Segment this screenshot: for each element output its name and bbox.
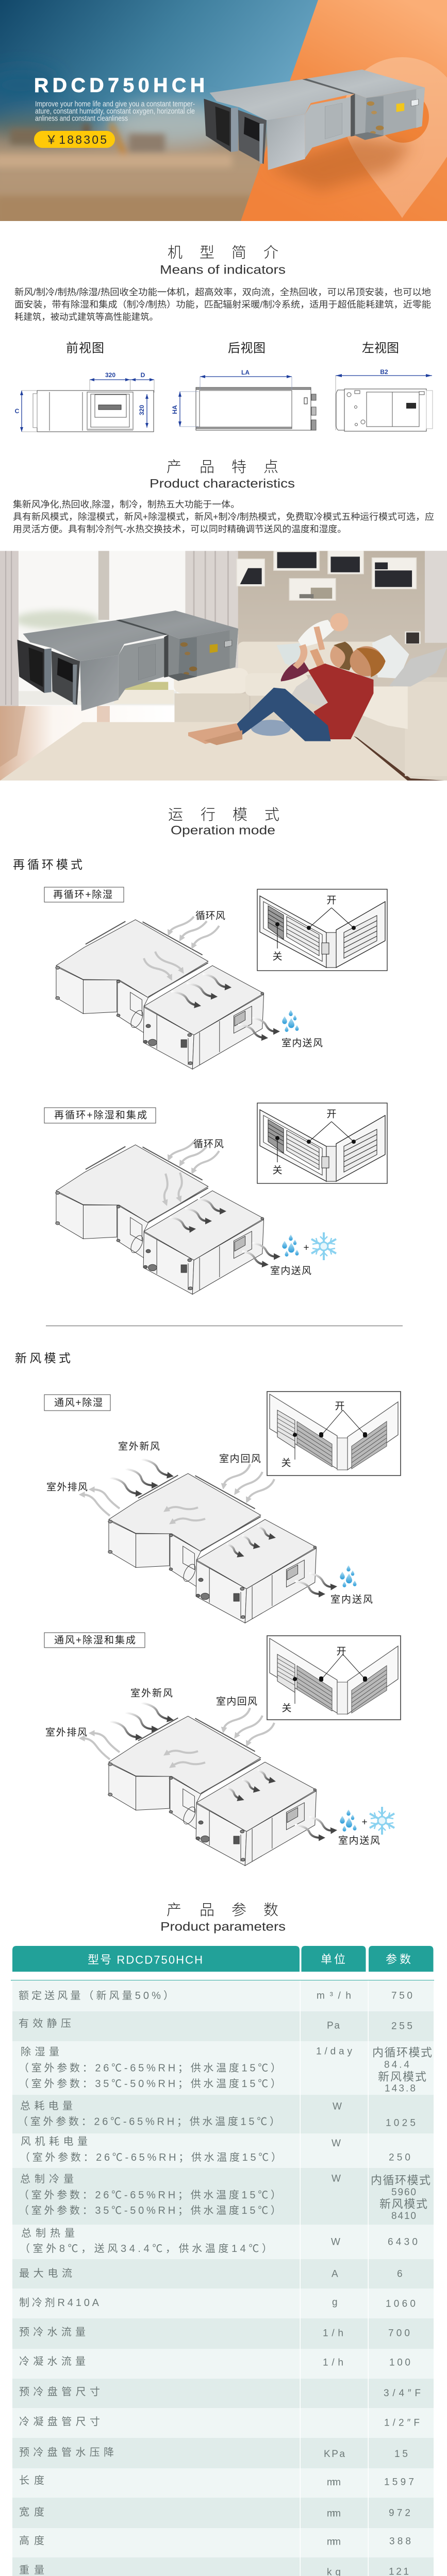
price pill: ￥188305	[45, 133, 107, 146]
icon: water drops	[340, 1809, 357, 1832]
label: outdoor exhaust air: 室外排风	[46, 1482, 88, 1493]
row: fan power	[20, 2136, 410, 2163]
heading: means of indicators	[160, 244, 286, 277]
label: indoor supply air: 室内送风	[282, 1038, 323, 1049]
damper inset	[267, 1392, 401, 1476]
row: dehumidification: 143.8	[385, 2083, 416, 2094]
row: total heating: （室外8℃，送风34.4℃，供水温度14℃）	[20, 2243, 272, 2255]
row: total cooling: （室外参数：35℃-50%RH；供水温度15℃）	[19, 2205, 281, 2216]
row: total heating: W	[331, 2237, 340, 2247]
unit line drawing	[108, 1473, 317, 1623]
row: weight	[19, 2564, 409, 2576]
mode label box: 通风+除湿	[54, 1397, 103, 1409]
row: precooling coil size: 3/4″F	[384, 2388, 421, 2399]
row: total cooling: 8410	[391, 2211, 416, 2222]
location pin shape	[343, 57, 447, 218]
label: indoor supply air: 室内送风	[338, 1835, 380, 1846]
row: total power: 1025	[386, 2117, 416, 2129]
panel: front view drawing: D	[141, 371, 145, 379]
row: total heating: 总制热量	[21, 2227, 75, 2239]
plus sign: +	[361, 1817, 368, 1828]
damper inset: 关	[281, 1457, 291, 1468]
table body: parameters	[12, 1980, 434, 2576]
row: precooling coil size	[19, 2386, 421, 2399]
label: indoor supply air: 室内送风	[270, 1265, 311, 1277]
row: condensing coil size: 1/2″F	[384, 2417, 420, 2429]
row: dehumidification: （室外参数：26℃-65%RH；供水温度15℃）	[19, 2062, 281, 2074]
damper inset: 关	[272, 1164, 283, 1176]
row: condensate water flow: 100	[389, 2358, 410, 2368]
row: refrigerant	[19, 2297, 416, 2309]
row: width: 宽度	[19, 2506, 44, 2518]
text block: introduction: 新风/制冷/制热/除湿/热回收全功能一体机，超高效率，双向流，全热回收，可以吊顶安装，也可以地	[14, 287, 431, 297]
hero subtitle	[35, 101, 195, 121]
row: total power: 总耗电量	[20, 2100, 73, 2112]
row: dehumidification: 内循环模式	[372, 2046, 432, 2059]
row: fan power: （室外参数：26℃-65%RH；供水温度15℃）	[20, 2151, 282, 2163]
row: coil water pressure drop	[19, 2446, 408, 2460]
row: dehumidification: （室外参数：35℃-50%RH；供水温度15℃）	[19, 2078, 281, 2090]
hero subtitle: anliness and constant cleanliness	[35, 114, 128, 123]
row: total cooling: 新风模式	[379, 2198, 427, 2210]
icon: water drops	[282, 1234, 299, 1257]
hero subtitle: ature, constant humidity, constant oxygen, horizontal cle	[35, 107, 195, 115]
row: height	[19, 2535, 411, 2547]
panel: ventilation plus dehumidification and integration	[44, 1633, 401, 1866]
damper inset: 关	[272, 951, 283, 962]
mode label box: 通风+除湿和集成	[54, 1634, 136, 1646]
label: outdoor exhaust air: 室外排风	[45, 1727, 87, 1738]
heading: means of indicators: Means of indicators	[160, 263, 286, 277]
row: total power: （室外参数：26℃-65%RH；供水温度15℃）	[18, 2115, 280, 2128]
row: total power: W	[333, 2101, 342, 2112]
heading: product characteristics: Product characteristics	[150, 477, 295, 490]
panel: rear view drawing: HA	[171, 405, 178, 414]
heading: recirculation mode: 再循环模式	[13, 858, 82, 871]
row: fan power: 250	[389, 2153, 410, 2163]
heading: product characteristics: 产品特点	[167, 459, 278, 476]
panel: rear view drawing	[171, 341, 316, 430]
panel: living room scene photo	[0, 550, 447, 781]
row: rated air volume: m³/h	[317, 1991, 351, 2001]
panel: front view drawing: 320	[138, 405, 145, 415]
plus sign: +	[303, 1243, 309, 1253]
row: weight: 重量	[19, 2564, 44, 2576]
icon: snowflake	[370, 1807, 394, 1835]
row: condensate water flow: 1/h	[323, 2358, 343, 2368]
row: max current: A	[332, 2269, 338, 2279]
label: circulating air: 循环风	[195, 910, 225, 921]
row: max current: 6	[397, 2269, 403, 2279]
price pill	[34, 131, 115, 148]
woman	[292, 676, 324, 696]
text block: product characteristics: 具有新风模式，除湿模式，新风+除湿模式，新风+制冷/制热模式，免费取冷模式五种运行模式可选，应	[13, 512, 434, 522]
panel: recirculation plus dehumidification and integration	[44, 1103, 387, 1294]
row: rated air volume	[19, 1990, 412, 2002]
label: outdoor fresh air: 室外新风	[118, 1440, 160, 1452]
damper inset	[257, 889, 387, 971]
panel: front view drawing: 前视图	[66, 341, 104, 355]
man	[313, 650, 325, 675]
table header	[12, 1946, 433, 1972]
row: precooling coil size: 预冷盘管尺寸	[19, 2386, 100, 2398]
heading: operation mode	[168, 806, 279, 838]
heading: operation mode: Operation mode	[171, 823, 275, 838]
row: condensate water flow: 冷凝水流量	[19, 2355, 86, 2367]
text block: product characteristics: 集新风净化,热回收,除湿，制冷，制热五大功能于一体。	[13, 499, 240, 510]
heading: product characteristics	[150, 459, 295, 490]
mode label box: 再循环+除湿和集成	[54, 1110, 147, 1121]
row: height: mm	[327, 2537, 341, 2547]
panel: front view drawing: C	[15, 408, 20, 415]
row: precooling water flow	[19, 2326, 410, 2339]
row: max current	[19, 2267, 403, 2279]
damper inset	[267, 1636, 401, 1720]
unit line drawing	[56, 920, 264, 1069]
panel: front view drawing: 320	[105, 371, 115, 379]
mode label box	[44, 887, 124, 902]
row: refrigerant: 制冷剂R410A	[19, 2297, 100, 2309]
panel: recirculation plus dehumidification	[44, 887, 387, 1069]
orange diagonal panel	[241, 0, 447, 221]
heading: fresh air mode: 新风模式	[15, 1351, 71, 1365]
row: condensing coil size: 冷凝盘管尺寸	[19, 2416, 100, 2428]
airflow arrows	[164, 1142, 276, 1264]
unit line drawing	[56, 1145, 264, 1294]
row: fan power: W	[332, 2138, 341, 2149]
row: total cooling: 内循环模式	[371, 2174, 431, 2187]
text block: product characteristics	[13, 499, 434, 534]
row: length: mm	[327, 2477, 341, 2488]
panel: rear view drawing: 后视图	[228, 341, 266, 355]
airflow arrows	[144, 917, 275, 1038]
mode label box	[44, 1395, 110, 1411]
row: static pressure: 有效静压	[19, 2018, 71, 2029]
row: height: 388	[389, 2536, 411, 2547]
panel: rear view drawing: LA	[241, 369, 250, 376]
row: width: 972	[389, 2508, 410, 2518]
row: total cooling	[19, 2173, 431, 2222]
row: length	[19, 2475, 414, 2488]
row: coil water pressure drop: KPa	[324, 2449, 345, 2460]
label: outdoor fresh air: 室外新风	[130, 1688, 173, 1699]
row: max current: 最大电流	[19, 2267, 72, 2279]
panel: ventilation plus dehumidification	[44, 1392, 401, 1623]
row: total cooling: 总制冷量	[20, 2173, 74, 2185]
row: length: 1597	[384, 2477, 414, 2487]
machine shadow	[268, 137, 412, 191]
product photo: air handling unit	[204, 70, 425, 170]
row: total heating	[20, 2227, 418, 2255]
unit line drawing	[108, 1716, 317, 1866]
label: indoor return air: 室内回风	[216, 1696, 257, 1707]
table header: 单位	[321, 1953, 345, 1966]
row: coil water pressure drop: 15	[394, 2449, 408, 2460]
row: total cooling: 5960	[391, 2187, 416, 2198]
row: condensate water flow	[19, 2355, 410, 2368]
row: width	[19, 2506, 410, 2519]
row: total power	[18, 2100, 416, 2129]
text block: introduction	[14, 287, 431, 322]
damper inset: 开	[335, 1401, 345, 1412]
damper inset: 关	[282, 1702, 292, 1714]
row: condensing coil size	[19, 2416, 420, 2429]
row: total cooling: W	[332, 2173, 341, 2184]
row: rated air volume: 额定送风量（新风量50%）	[19, 1990, 174, 2002]
row: refrigerant: g	[332, 2297, 338, 2308]
text block: introduction: 面安装，带有除湿和集成（制冷/制热）功能，匹配辐射采暖/制冷系统，适用于超低能耗建筑，近零能	[14, 299, 431, 310]
heading: product parameters: Product parameters	[160, 1920, 286, 1934]
panel: front view drawing	[15, 341, 154, 432]
row: total cooling: （室外参数：26℃-65%RH；供水温度15℃）	[19, 2189, 281, 2201]
heading: product parameters	[160, 1902, 286, 1934]
row: precooling water flow: 1/h	[323, 2328, 343, 2339]
damper inset: 开	[326, 1109, 337, 1120]
row: refrigerant: 1060	[386, 2299, 416, 2309]
mode label box	[44, 1633, 145, 1648]
row: fan power: 风机耗电量	[21, 2136, 88, 2147]
label: circulating air: 循环风	[193, 1139, 224, 1150]
panel: left view drawing: 左视图	[362, 341, 399, 355]
row: static pressure: Pa	[327, 2021, 340, 2031]
panel: left view drawing: B2	[380, 368, 388, 376]
row: length: 长度	[19, 2475, 44, 2486]
row: coil water pressure drop: 预冷盘管水压降	[19, 2446, 114, 2459]
row: static pressure: 255	[391, 2021, 412, 2032]
heading: operation mode: 运行模式	[168, 806, 279, 823]
row: dehumidification: 1/day	[316, 2046, 353, 2057]
hero title: RDCD750HCH	[34, 74, 205, 97]
row: dehumidification	[19, 2046, 432, 2094]
row: dehumidification: 新风模式	[378, 2070, 426, 2083]
panel: left view drawing	[336, 341, 433, 431]
label: indoor supply air: 室内送风	[330, 1594, 373, 1605]
mode label box	[44, 1108, 156, 1123]
row: dehumidification: 84.4	[384, 2060, 409, 2070]
row: precooling water flow: 预冷水流量	[19, 2326, 86, 2338]
row backgrounds	[12, 1980, 434, 2576]
row: height: 高度	[19, 2535, 44, 2547]
hero subtitle: Improve your home life and give you a constant temper-	[35, 100, 195, 108]
hero blurred background	[0, 0, 318, 221]
heading: means of indicators: 机型简介	[168, 244, 278, 261]
row: width: mm	[327, 2508, 341, 2519]
heading: product parameters: 产品参数	[167, 1902, 278, 1919]
damper inset: 开	[336, 1647, 346, 1657]
row: static pressure	[19, 2018, 412, 2032]
damper inset: 开	[326, 895, 337, 906]
label: indoor return air: 室内回风	[219, 1453, 261, 1464]
airflow arrows	[83, 1703, 333, 1838]
product photo in room	[17, 611, 238, 711]
row: dehumidification: 除湿量	[21, 2046, 59, 2058]
shelves	[237, 550, 416, 600]
row: rated air volume: 750	[391, 1991, 412, 2001]
row: precooling water flow: 700	[388, 2328, 410, 2339]
damper inset	[257, 1103, 387, 1183]
table header: 型号 RDCD750HCH	[88, 1954, 203, 1966]
mode label box: 再循环+除湿	[53, 889, 112, 901]
panel: hero banner	[0, 0, 447, 245]
text block: introduction: 耗建筑，被动式建筑等高性能建筑。	[14, 312, 158, 322]
table header: 参数	[386, 1953, 411, 1966]
airflow arrows	[83, 1459, 333, 1594]
baby	[298, 620, 335, 648]
row: total heating: 6430	[388, 2237, 418, 2247]
text block: product characteristics: 用灵活方便。具有制冷剂气-水热交换技术，可以同时精确调节送风的温度和湿度。	[13, 524, 346, 534]
icon: water drops	[282, 1010, 299, 1032]
icon: water drops	[340, 1565, 357, 1587]
icon: snowflake	[311, 1232, 336, 1260]
sofa	[238, 642, 377, 675]
